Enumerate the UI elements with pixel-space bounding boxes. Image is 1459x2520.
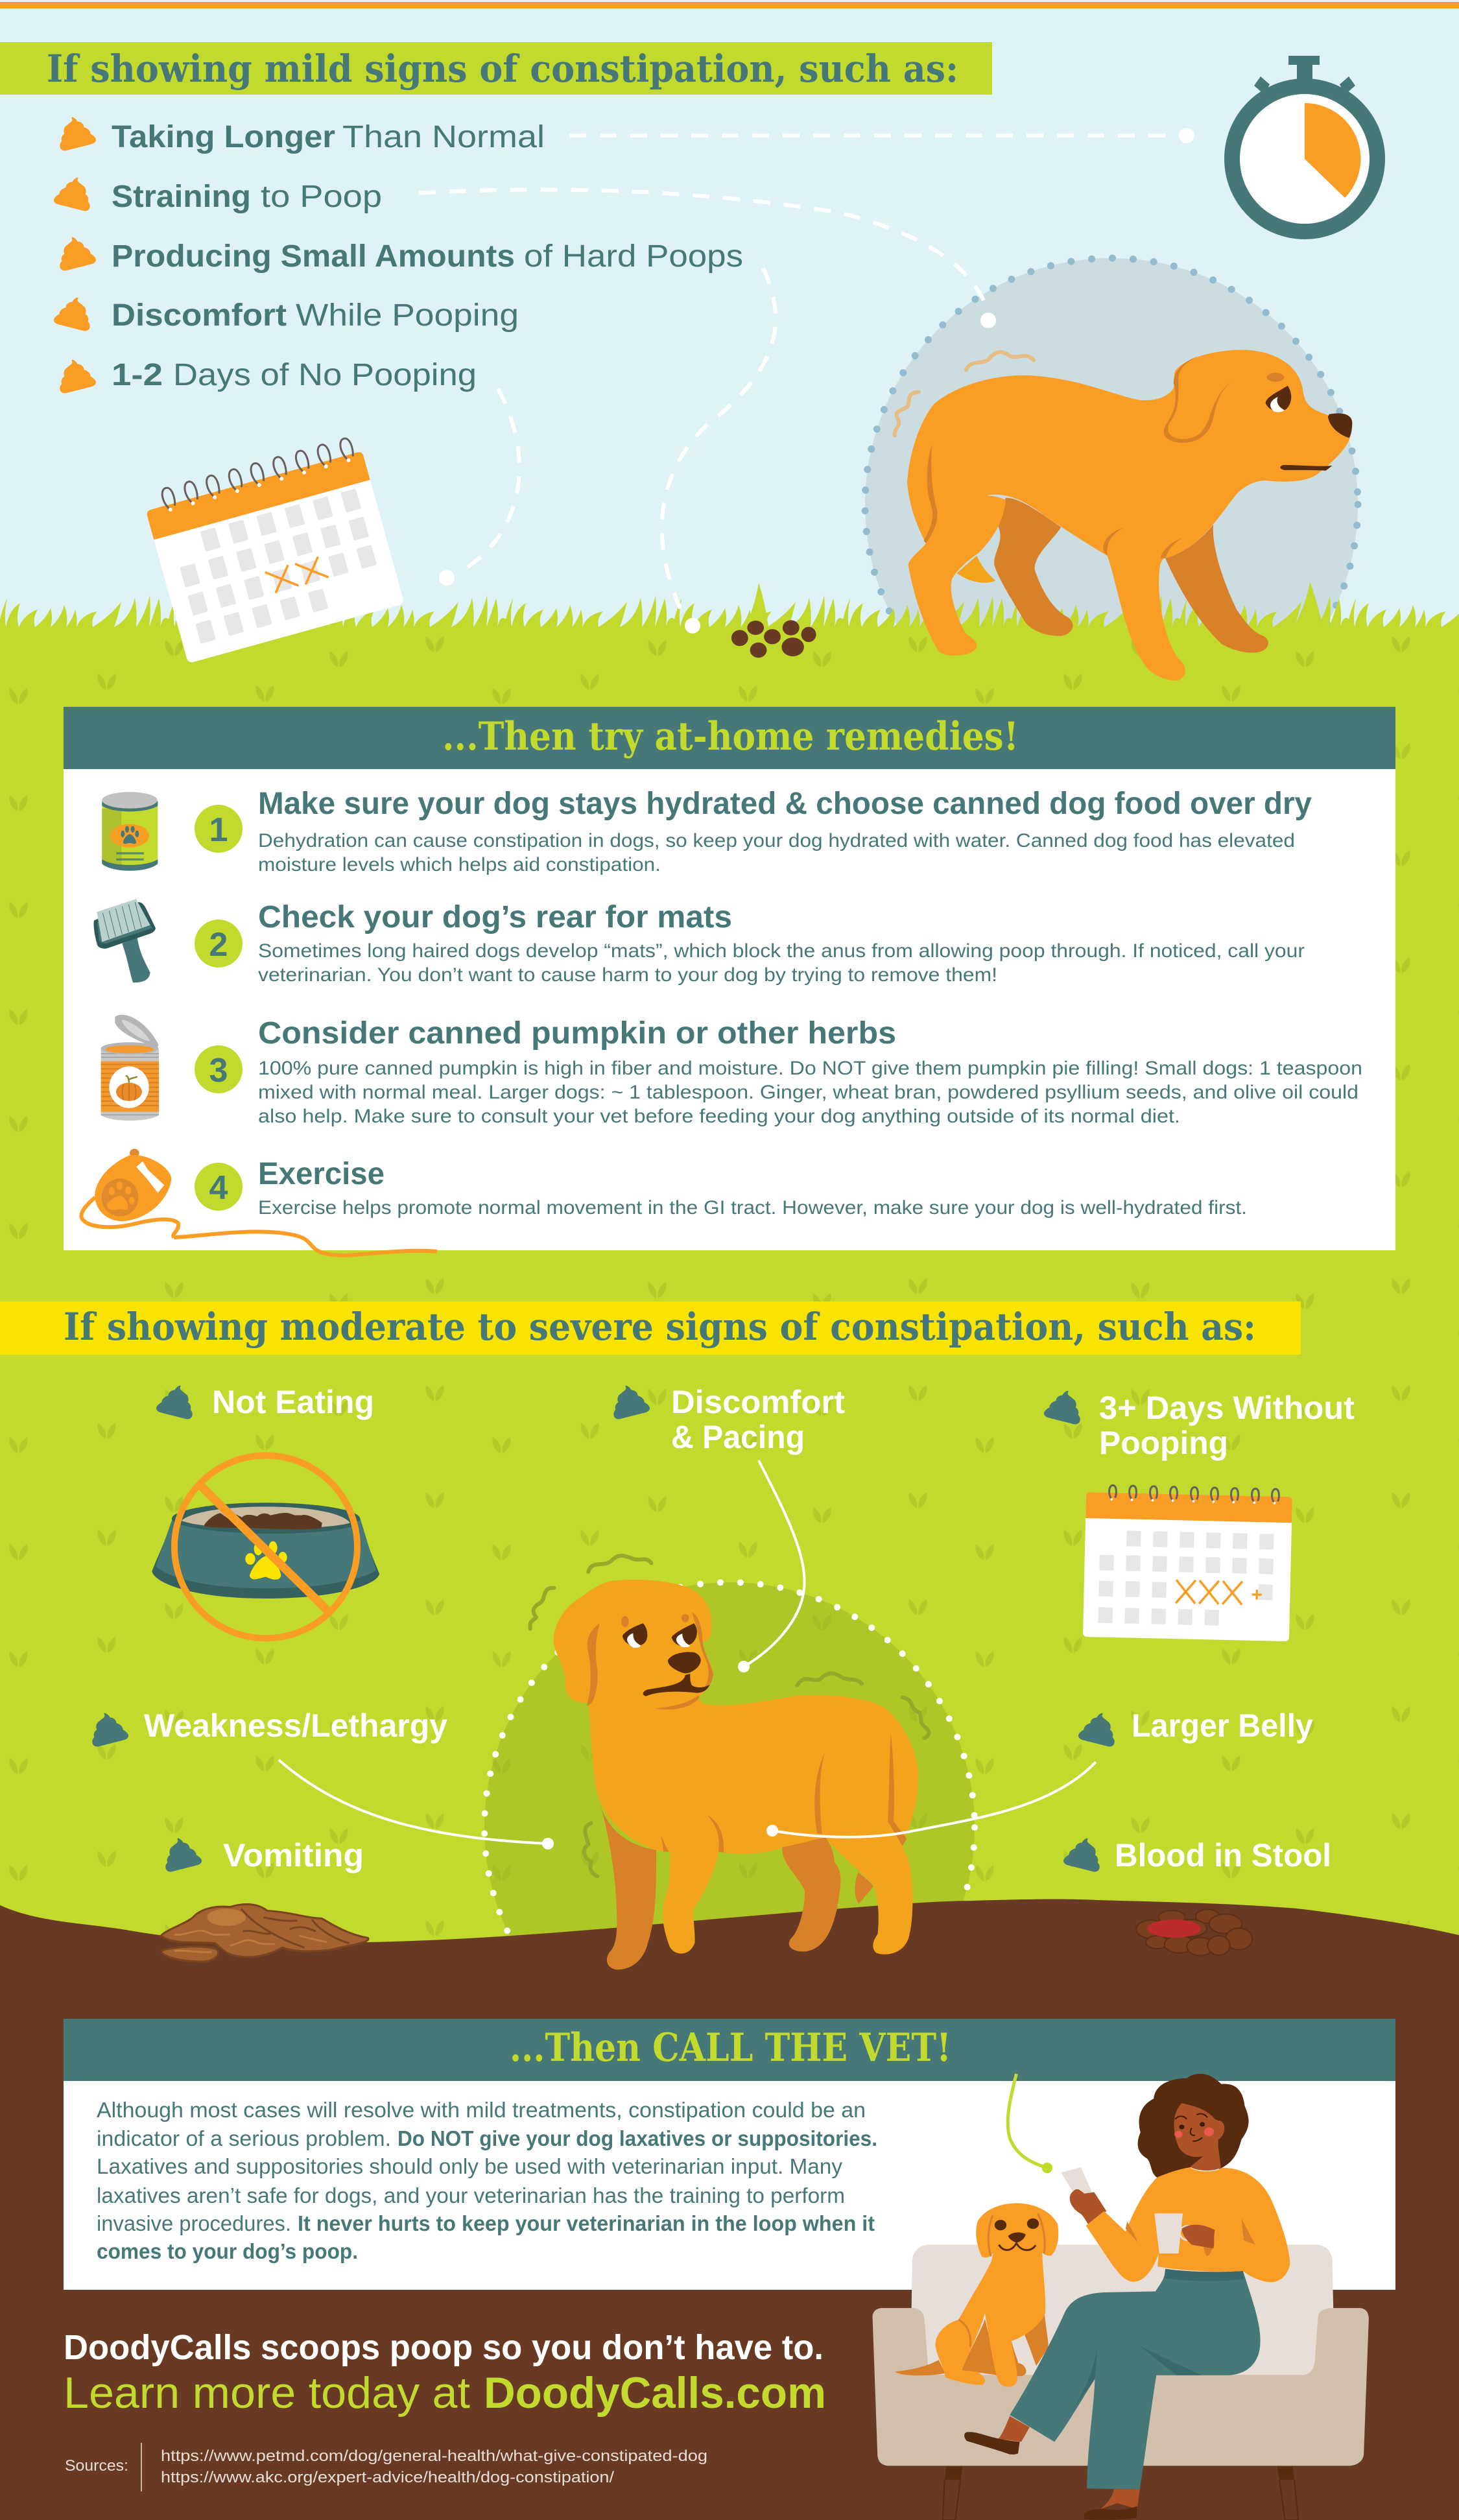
call to action xyxy=(64,2328,826,2418)
call to action: Learn more today at xyxy=(64,2368,470,2418)
eyes xyxy=(623,1623,697,1646)
number 1 xyxy=(195,805,243,853)
vet heading: ...Then CALL THE VET! xyxy=(510,2025,951,2071)
green halo behind worried dog xyxy=(484,1582,975,2073)
body xyxy=(554,1580,918,1955)
label: three plus days: 3+ Days Without xyxy=(1099,1390,1355,1426)
far front leg xyxy=(600,1804,656,1969)
fur folds and ears xyxy=(587,1612,907,1853)
dog halo circle xyxy=(865,258,1358,751)
text: no pooping: 1-2 xyxy=(112,358,163,392)
icon: upright calendar: + xyxy=(1251,1584,1263,1606)
far front leg xyxy=(1165,525,1268,653)
icon: canned dog food xyxy=(102,792,158,871)
icon: vomit pile xyxy=(161,1904,368,1962)
sources: Sources: xyxy=(65,2457,128,2475)
text: taking longer: Taking Longer xyxy=(112,120,335,154)
icon: dog bowl with prohibition sign xyxy=(152,1455,379,1638)
brow spot xyxy=(1267,373,1284,382)
mouth xyxy=(1280,465,1333,471)
icon: poop 4 xyxy=(54,298,90,331)
icon: stopwatch xyxy=(1224,56,1385,239)
band: mild signs heading: If showing mild signs of constipation, such as: xyxy=(47,47,958,91)
chair back xyxy=(910,2244,1334,2375)
phone xyxy=(1061,2167,1099,2213)
face xyxy=(1174,2103,1224,2170)
text: taking longer: Than Normal xyxy=(342,120,545,154)
sources: https://www.petmd.com/dog/general-health/what-give-constipated-dog xyxy=(161,2447,707,2465)
body 2: veterinarian. You don’t want to cause harm to your dog by trying to remove them! xyxy=(258,964,997,986)
grass and green field xyxy=(0,580,1459,2010)
heading 3: Consider canned pumpkin or other herbs xyxy=(258,1016,896,1051)
mild signs list xyxy=(54,117,743,393)
vet paragraph: It never hurts to keep your veterinarian in the loop when it xyxy=(298,2211,875,2235)
number 3 xyxy=(195,1045,243,1093)
halo dotted outline xyxy=(484,1582,975,2073)
text: straining: Straining xyxy=(112,180,251,214)
icon: slicker brush xyxy=(94,899,156,982)
icon: upright calendar xyxy=(1083,1485,1292,1641)
label: not eating: Not Eating xyxy=(212,1384,374,1420)
hand holding mug xyxy=(1182,2225,1215,2248)
ear and folds xyxy=(924,356,1231,558)
remedies heading: ...Then try at-home remedies! xyxy=(442,714,1019,759)
icon: poop 5 xyxy=(60,360,96,393)
number 4 xyxy=(195,1163,243,1211)
vet paragraph: Do NOT give your dog laxatives or suppositories. xyxy=(397,2126,877,2150)
body 3: mixed with normal meal. Larger dogs: ~ 1 tablespoon. Ginger, wheat bran, powdered psyllium seeds, and olive oil could xyxy=(258,1082,1358,1103)
icon: canned pumpkin xyxy=(101,1015,159,1121)
nose and mouth xyxy=(643,1652,710,1696)
stink squiggles xyxy=(895,352,1034,435)
vet paragraph: indicator of a serious problem. xyxy=(97,2126,391,2150)
number 3: 3 xyxy=(209,1052,228,1089)
top orange bar xyxy=(0,2,1459,8)
green pointer line xyxy=(1008,2074,1047,2168)
hand holding phone xyxy=(1070,2189,1106,2226)
sky background xyxy=(0,0,1459,648)
vet paragraph: Laxatives and suppositories should only be used with veterinarian input. Many xyxy=(97,2154,842,2178)
tail xyxy=(957,556,995,583)
call to action: DoodyCalls.com xyxy=(484,2368,826,2418)
hair xyxy=(1138,2074,1249,2178)
label: discomfort and pacing xyxy=(613,1384,845,1455)
icon: retractable leash xyxy=(81,1148,437,1255)
illustration: woman and dog on armchair xyxy=(873,2074,1369,2520)
body xyxy=(907,350,1351,681)
label: blood in stool: Blood in Stool xyxy=(1115,1837,1331,1873)
text: small amounts: Producing Small Amounts xyxy=(112,239,515,274)
sources: https://www.akc.org/expert-advice/health/dog-constipation/ xyxy=(161,2469,614,2486)
body 4: Exercise helps promote normal movement in the GI tract. However, make sure your dog is well-hydrated first. xyxy=(258,1197,1247,1218)
far hind leg xyxy=(994,498,1073,636)
panel: at-home remedies xyxy=(64,707,1395,1255)
heading 4: Exercise xyxy=(258,1157,385,1191)
icon: poop 3 xyxy=(60,237,96,270)
band: moderate to severe heading: If showing moderate to severe signs of constipation, such as: xyxy=(64,1305,1256,1349)
nose xyxy=(1328,413,1352,438)
number 2 xyxy=(195,920,243,968)
label: three plus days xyxy=(1044,1390,1355,1461)
eye xyxy=(1266,386,1291,411)
vet paragraph: comes to your dog’s poop. xyxy=(97,2239,358,2263)
label: discomfort and pacing: Discomfort xyxy=(671,1384,845,1420)
heading 2: Check your dog’s rear for mats xyxy=(258,900,732,934)
body 2: Sometimes long haired dogs develop “mats”, which block the anus from allowing poop through. If noticed, call your xyxy=(258,940,1305,962)
icon: poop 1 xyxy=(60,117,96,150)
icon: small hard poop pile xyxy=(731,620,816,658)
dashed connector lines xyxy=(419,136,1177,617)
label: discomfort and pacing: & Pacing xyxy=(671,1419,805,1455)
text: discomfort: While Pooping xyxy=(296,298,519,333)
text: straining: to Poop xyxy=(261,180,382,214)
feet xyxy=(998,2416,1140,2509)
number 1: 1 xyxy=(209,811,228,849)
brown ground and lower section xyxy=(0,1899,1459,2520)
dog: mild signs, constipated standing dog xyxy=(895,350,1352,681)
label: vomiting: Vomiting xyxy=(223,1837,364,1873)
number 2: 2 xyxy=(209,926,228,964)
sweater xyxy=(1086,2167,1290,2282)
icon: bloody stool pile xyxy=(1136,1909,1252,1956)
vet paragraph: invasive procedures. xyxy=(97,2211,291,2235)
sitting dog xyxy=(895,2203,1058,2387)
icon: tilted calendar xyxy=(141,434,405,663)
body 3: 100% pure canned pumpkin is high in fiber and moisture. Do NOT give them pumpkin pie filling! Small dogs: 1 teaspoon xyxy=(258,1058,1362,1079)
text: discomfort: Discomfort xyxy=(112,298,287,333)
label: larger belly: Larger Belly xyxy=(1132,1707,1313,1744)
pants xyxy=(1010,2269,1261,2489)
vet paragraph: laxatives aren’t safe for dogs, and your veterinarian has the training to perform xyxy=(97,2183,845,2207)
squiggles xyxy=(530,1556,929,1876)
sprout pattern on field xyxy=(0,627,1459,2010)
call to action: DoodyCalls scoops poop so you don’t have to. xyxy=(64,2328,824,2367)
mug xyxy=(1154,2213,1183,2253)
tail xyxy=(855,1872,873,1904)
number 4: 4 xyxy=(209,1169,228,1207)
sources xyxy=(65,2443,707,2491)
far hind leg xyxy=(782,1837,840,1951)
panel: call the vet xyxy=(64,2019,1395,2290)
label: three plus days: Pooping xyxy=(1099,1425,1228,1461)
connector end dots xyxy=(439,128,1194,634)
worried dog: severe signs xyxy=(530,1556,929,1969)
body 1: moisture levels which helps aid constipation. xyxy=(258,854,661,875)
heading 1: Make sure your dog stays hydrated & choose canned dog food over dry xyxy=(258,787,1312,821)
callout lines with dots xyxy=(279,1460,1096,1848)
text: no pooping: Days of No Pooping xyxy=(173,358,477,392)
icon: poop 2 xyxy=(54,178,90,211)
body 3: also help. Make sure to consult your vet before feeding your dog anything outside of its normal diet. xyxy=(258,1106,1180,1127)
text: small amounts: of Hard Poops xyxy=(524,239,743,274)
label: weakness: Weakness/Lethargy xyxy=(144,1707,447,1744)
vet paragraph: Although most cases will resolve with mild treatments, constipation could be an xyxy=(97,2098,866,2122)
body 1: Dehydration can cause constipation in dogs, so keep your dog hydrated with water. Canned dog food has elevated xyxy=(258,830,1295,851)
chair legs xyxy=(945,2467,1294,2480)
chair seat and arms xyxy=(873,2308,1369,2466)
label: vomiting xyxy=(165,1837,364,1873)
